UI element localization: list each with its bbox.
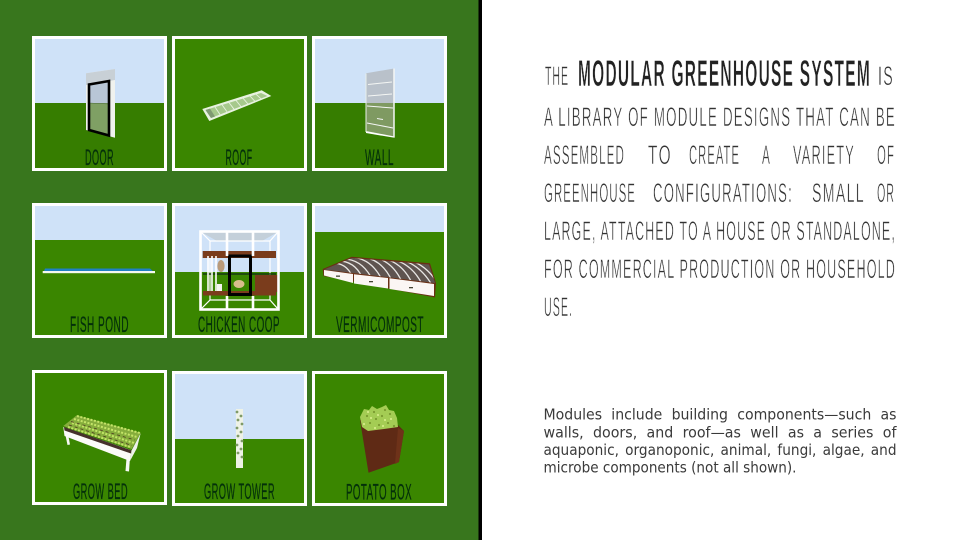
icon: wall xyxy=(366,68,394,138)
icon: chicken coop xyxy=(200,231,278,310)
card: fish pond xyxy=(34,204,166,337)
card: chicken coop: CHICKEN COOP xyxy=(198,312,280,337)
body text block: walls, doors, and roof—as well as a series of xyxy=(544,424,897,442)
icon: potato box xyxy=(360,405,404,473)
card: grow bed: GROW BED xyxy=(73,479,128,504)
card: chicken coop xyxy=(174,204,306,337)
text: OF xyxy=(877,140,895,170)
icon: grow tower xyxy=(236,409,243,468)
card: vermicompost xyxy=(314,204,446,337)
card: potato box: POTATO BOX xyxy=(346,480,412,504)
body text block: aquaponic, organoponic, animal, fungi, algae, and xyxy=(544,442,896,459)
body text block: microbe components (not all shown). xyxy=(544,460,796,476)
card: grow tower xyxy=(174,372,306,504)
card: wall: WALL xyxy=(365,145,394,170)
card: vermicompost: VERMICOMPOST xyxy=(336,312,424,337)
icon: hen upper xyxy=(217,260,225,272)
heading text block: ASSEMBLED xyxy=(544,140,625,170)
black divider bar xyxy=(478,0,482,540)
heading text block xyxy=(544,53,896,322)
heading text block: IS xyxy=(878,61,894,91)
text: OR xyxy=(877,178,895,208)
icon: hen lower xyxy=(234,280,244,288)
icon: grow bed xyxy=(63,415,141,472)
heading text block: SMALL xyxy=(812,178,865,208)
card: door: DOOR xyxy=(85,145,114,170)
heading text block: TO xyxy=(648,140,672,170)
card: grow tower: GROW TOWER xyxy=(204,479,275,504)
green background panel xyxy=(0,0,479,540)
card: wall xyxy=(314,38,446,170)
icon: door xyxy=(86,69,115,138)
heading text block: A xyxy=(762,140,771,170)
heading text block: THE xyxy=(545,61,569,91)
card: grow bed xyxy=(34,372,166,504)
icon: roof xyxy=(202,90,271,121)
heading text block: CREATE xyxy=(689,140,740,170)
heading text block: GREENHOUSE xyxy=(544,178,636,208)
card: door xyxy=(34,38,166,170)
card: fish pond: FISH POND xyxy=(70,312,129,337)
card: roof xyxy=(174,38,306,170)
body text block xyxy=(544,406,897,476)
heading text block: USE. xyxy=(544,292,573,322)
icon: water bucket xyxy=(217,284,222,291)
card: potato box xyxy=(314,372,446,504)
icon: fish pond xyxy=(43,268,155,273)
heading text block: VARIETY xyxy=(793,140,855,170)
heading text block: CONFIGURATIONS: xyxy=(653,178,793,208)
body text block: Modules include building components—such as xyxy=(544,406,896,424)
icon: vermicompost bin xyxy=(323,257,438,298)
card: roof: ROOF xyxy=(226,145,252,170)
